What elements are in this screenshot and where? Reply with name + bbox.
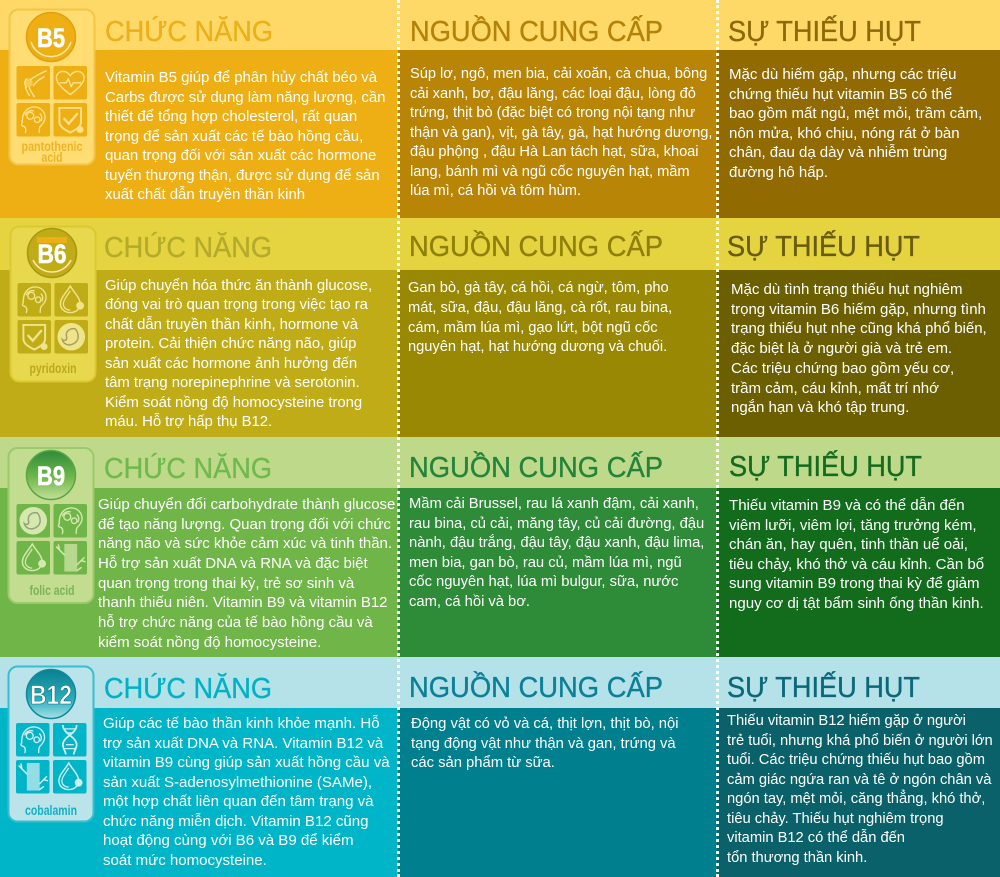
text: deficiency B5: nôn mửa, khó chịu, nóng rát ở bàn bbox=[729, 125, 960, 142]
text: function B12: soát mức homocysteine. bbox=[103, 852, 267, 869]
panel: vitamin B5 row bbox=[0, 0, 1000, 218]
text: sources B5: đậu phộng , đậu Hà Lan tách hạt, sữa, khoai bbox=[410, 144, 699, 160]
text: function B9: năng não và sức khỏe cảm xúc và tinh thần. bbox=[98, 535, 392, 552]
text: function B6: protein. Cải thiện chức năng não, giúp bbox=[105, 336, 356, 352]
text: deficiency B5 bbox=[729, 66, 982, 181]
badge: B5 pantothenic acid bbox=[8, 8, 96, 166]
text: deficiency B9 bbox=[729, 497, 984, 612]
text: sources B5: cải xanh, bơ, đậu lăng, các loại đậu, lòng đỏ bbox=[410, 86, 696, 102]
text: sources B9: men bia, gan bò, rau củ, mầm lúa mì, ngũ bbox=[409, 555, 682, 571]
text: sources B12: Động vật có vỏ và cá, thịt lợn, thịt bò, nội bbox=[411, 716, 678, 732]
text: function B6: sản xuất các hormone ảnh hưởng đến bbox=[105, 356, 357, 372]
text: function B6 bbox=[105, 278, 372, 430]
badge: B6 pyridoxin: pyridoxin bbox=[30, 360, 76, 376]
heading: deficiency B6: SỰ THIẾU HỤT bbox=[727, 229, 920, 263]
text: deficiency B6: trọng vitamin B6 hiếm gặp, nhưng tình bbox=[731, 301, 986, 318]
badge: B5 pantothenic acid: acid bbox=[42, 149, 62, 165]
text: sources B12 bbox=[411, 716, 678, 771]
heading: function B9: CHỨC NĂNG bbox=[104, 452, 272, 485]
text: deficiency B12: tiêu chảy. Thiếu hụt nghiêm trọng bbox=[727, 811, 944, 827]
text: sources B9 bbox=[409, 496, 704, 610]
text: deficiency B9: viêm lưỡi, viêm lợi, tăng trưởng kém, bbox=[729, 517, 977, 534]
text: function B9: Giúp chuyển đổi carbohydrate thành glucose bbox=[98, 496, 395, 513]
badge: B12 cobalamin: B12 bbox=[30, 680, 72, 710]
text: sources B12: các sản phẩm từ sữa. bbox=[411, 755, 555, 771]
text: function B5: trọng để sản xuất các tế bào hồng cầu, bbox=[105, 128, 363, 145]
panel: vitamin B9 row bbox=[0, 437, 1000, 657]
text: function B6: Kiểm soát nồng độ homocysteine trong bbox=[105, 395, 362, 411]
text: deficiency B12: Thiếu vitamin B12 hiếm gặp ở người bbox=[727, 713, 966, 729]
heading: deficiency B12: SỰ THIẾU HỤT bbox=[727, 670, 920, 704]
text: function B9: hỗ trợ chức năng của tế bào hồng cầu và bbox=[98, 614, 373, 631]
badge: B6 pyridoxin bbox=[10, 226, 96, 382]
text: sources B6: nguyên hạt, hạt hướng dương và chuối. bbox=[408, 339, 667, 355]
text: sources B5: lang, bánh mì và ngũ cốc nguyên hạt, mầm bbox=[410, 164, 690, 180]
text: function B9: Hỗ trợ sản xuất DNA và RNA và đặc biệt bbox=[98, 555, 368, 572]
text: function B12: trợ sản xuất DNA và RNA. Vitamin B12 và bbox=[103, 735, 383, 752]
text: deficiency B12: vitamin B12 có thể dẫn đến bbox=[727, 830, 905, 846]
badge: B9 folic acid bbox=[8, 447, 94, 604]
text: function B6: chất dẫn truyền thần kinh, hormone và bbox=[105, 317, 358, 333]
text: function B9: để tạo năng lượng. Quan trọng đối với chức bbox=[98, 516, 391, 533]
panel: vitamin B6 row bbox=[0, 218, 1000, 437]
text: function B12: một hợp chất liên quan đến tâm trạng và bbox=[103, 793, 374, 810]
text: function B5 bbox=[105, 69, 385, 203]
text: deficiency B6: Mặc dù tình trạng thiếu hụt nghiêm bbox=[731, 281, 963, 298]
heading: function B5: CHỨC NĂNG bbox=[105, 15, 273, 48]
text: sources B5 bbox=[410, 66, 712, 199]
text: function B6: đóng vai trò quan trọng trong việc tạo ra bbox=[105, 297, 368, 313]
text: sources B6: Gan bò, gà tây, cá hồi, cá ngừ, tôm, pho bbox=[408, 280, 669, 296]
text: deficiency B9: nguy cơ dị tật bẩm sinh ống thần kinh. bbox=[729, 595, 984, 612]
text: deficiency B12: tuổi. Các triệu chứng thiếu hụt bao gồm bbox=[727, 752, 985, 768]
text: deficiency B6: ngắn hạn và khó tập trung. bbox=[731, 399, 909, 416]
text: function B6: tâm trạng norepinephrine và serotonin. bbox=[105, 375, 360, 391]
text: deficiency B12: cảm giác ngứa ran và tê ở ngón chân và bbox=[727, 772, 991, 788]
text: deficiency B5: chứng thiếu hụt vitamin B5 có thể bbox=[729, 86, 952, 103]
text: function B5: xuất chất dẫn truyền thần kinh bbox=[105, 186, 305, 203]
badge: B5 pantothenic acid: B5 bbox=[37, 23, 65, 53]
text: function B9: kiểm soát nồng độ homocysteine. bbox=[98, 634, 321, 651]
text: deficiency B6 bbox=[731, 281, 987, 416]
badge: B9 folic acid: B9 bbox=[37, 461, 65, 491]
text: sources B9: cốc nguyên hạt, lúa mì bulgur, sữa, nước bbox=[409, 574, 678, 590]
text: deficiency B5: Mặc dù hiếm gặp, nhưng các triệu bbox=[729, 66, 956, 83]
heading: deficiency B9: SỰ THIẾU HỤT bbox=[729, 449, 922, 483]
badge: B12 cobalamin: cobalamin bbox=[25, 802, 77, 818]
text: function B6: Giúp chuyển hóa thức ăn thành glucose, bbox=[105, 278, 372, 294]
badge: B9 folic acid: folic acid bbox=[30, 582, 74, 598]
text: sources B5: trứng, thịt bò (đặc biệt có trong nội tạng như bbox=[410, 105, 695, 121]
text: sources B6: mát, sữa, đậu, đậu lăng, cà rốt, rau bina, bbox=[408, 300, 672, 316]
heading: function B12: CHỨC NĂNG bbox=[104, 672, 272, 705]
text: sources B5: Súp lơ, ngô, men bia, cải xoăn, cà chua, bông bbox=[410, 66, 707, 82]
text: deficiency B6: trầm cảm, cáu kỉnh, mất trí nhớ bbox=[731, 380, 939, 397]
text: sources B9: rau bina, củ cải, măng tây, củ cải đường, đậu bbox=[409, 516, 704, 532]
badge: B6 pyridoxin: B6 bbox=[38, 239, 66, 269]
badge: B5 pantothenic acid: pantothenic bbox=[22, 138, 83, 154]
text: deficiency B12 bbox=[727, 713, 993, 866]
text: function B12: hoạt động cùng với B6 và B9 để kiểm bbox=[103, 832, 354, 849]
text: function B5: Carbs được sử dụng làm năng lượng, cần bbox=[105, 89, 385, 106]
text: function B5: Vitamin B5 giúp để phân hủy chất béo và bbox=[105, 69, 377, 86]
text: deficiency B12: tổn thương thần kinh. bbox=[727, 850, 867, 866]
text: deficiency B5: đường hô hấp. bbox=[729, 164, 828, 181]
text: sources B6: cám, mầm lúa mì, gạo lứt, bột ngũ cốc bbox=[408, 320, 658, 336]
text: sources B9: Mầm cải Brussel, rau lá xanh đậm, cải xanh, bbox=[409, 496, 699, 512]
panel: vitamin B12 row bbox=[0, 657, 1000, 877]
text: sources B12: tạng động vật như thận và gan, trứng và bbox=[411, 736, 676, 752]
text: deficiency B6: Các triệu chứng bao gồm yếu cơ, bbox=[731, 360, 954, 377]
text: deficiency B5: chân, đau dạ dày và nhiễm trùng bbox=[729, 144, 947, 161]
heading: sources B9: NGUỒN CUNG CẤP bbox=[409, 450, 663, 484]
text: function B12: sản xuất S-adenosylmethionine (SAMe), bbox=[103, 774, 372, 791]
text: function B9: quan trọng trong thai kỳ, trẻ sơ sinh và bbox=[98, 575, 354, 592]
text: deficiency B6: đặc biệt là ở người già và trẻ em. bbox=[731, 340, 952, 357]
text: deficiency B12: ngón tay, mệt mỏi, căng thẳng, khó thở, bbox=[727, 791, 985, 807]
text: function B5: tuyến thượng thận, được sử dụng để sản bbox=[105, 167, 380, 184]
text: sources B9: cam, cá hồi và bơ. bbox=[409, 594, 530, 610]
text: sources B6 bbox=[408, 280, 672, 355]
heading: sources B6: NGUỒN CUNG CẤP bbox=[409, 229, 663, 263]
text: deficiency B5: bao gồm mất ngủ, mệt mỏi, trầm cảm, bbox=[729, 105, 982, 122]
text: function B12: vitamin B9 cùng giúp sản xuất hồng cầu và bbox=[103, 754, 390, 771]
text: function B9: thanh thiếu niên. Vitamin B9 và vitamin B12 bbox=[98, 594, 388, 611]
text: deficiency B9: Thiếu vitamin B9 và có thể dẫn đến bbox=[729, 497, 965, 514]
text: sources B9: nành, đậu trắng, đậu tây, đậu xanh, đậu lima, bbox=[409, 535, 704, 551]
text: function B5: quan trọng đối với sản xuất các hormone bbox=[105, 147, 376, 164]
text: sources B5: lúa mì, cá hồi và tôm hùm. bbox=[410, 183, 581, 199]
text: deficiency B6: trạng thiếu hụt nhẹ cũng khá phổ biến, bbox=[731, 320, 987, 337]
heading: sources B12: NGUỒN CUNG CẤP bbox=[409, 670, 663, 704]
text: function B9 bbox=[98, 496, 395, 651]
text: deficiency B9: chán ăn, hay quên, tinh thần uể oải, bbox=[729, 536, 968, 553]
text: function B12: chức năng miễn dịch. Vitamin B12 cũng bbox=[103, 813, 368, 830]
heading: function B6: CHỨC NĂNG bbox=[104, 231, 272, 264]
text: sources B5: thận và gan), vịt, gà tây, gà, hạt hướng dương, bbox=[410, 125, 712, 141]
badge: B12 cobalamin bbox=[8, 666, 94, 822]
text: function B12 bbox=[103, 715, 390, 869]
text: function B5: thiết để tổng hợp cholesterol, rất quan bbox=[105, 108, 357, 125]
text: function B12: Giúp các tế bào thần kinh khỏe mạnh. Hỗ bbox=[103, 715, 380, 732]
text: deficiency B9: tiêu chảy, khó thở và cáu kỉnh. Cần bổ bbox=[729, 556, 984, 573]
text: deficiency B12: trẻ tuổi, nhưng khá phổ biến ở người lớn bbox=[727, 733, 993, 749]
heading: deficiency B5: SỰ THIẾU HỤT bbox=[728, 14, 921, 48]
text: function B6: máu. Hỗ trợ hấp thụ B12. bbox=[105, 414, 272, 430]
text: deficiency B9: sung vitamin B9 trong thai kỳ để giảm bbox=[729, 575, 980, 592]
heading: sources B5: NGUỒN CUNG CẤP bbox=[410, 14, 663, 48]
